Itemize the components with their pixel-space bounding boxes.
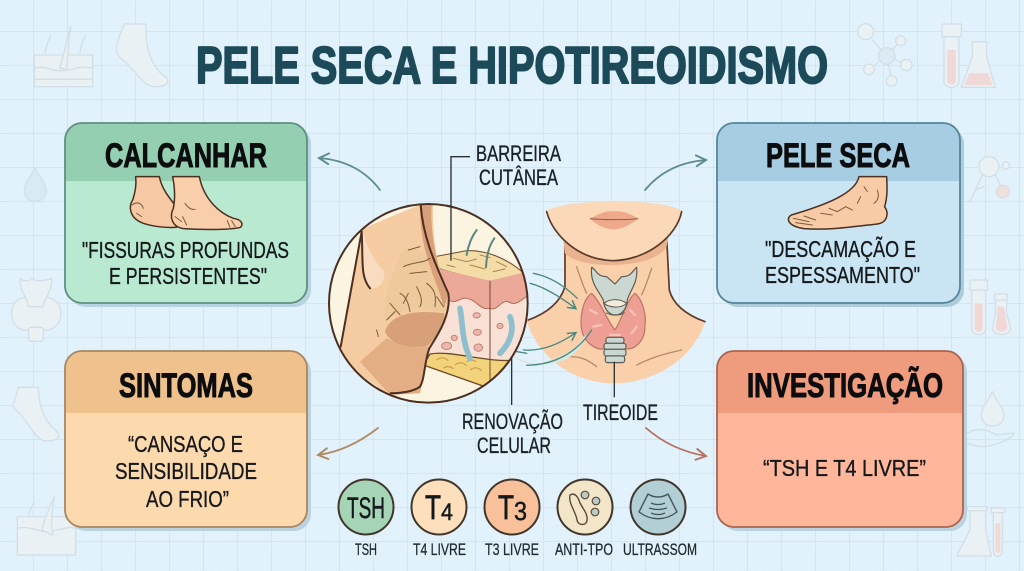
- icon: thyroid cartilage: [591, 267, 637, 315]
- arrows: skin to thyroid: [498, 273, 592, 365]
- label: tireoide: TIREOIDE: [583, 400, 658, 425]
- exam icon: T4 livre: [412, 480, 466, 559]
- icon: faded molecule top right: [858, 24, 912, 86]
- text: cansaco: SENSIBILIDADE: [115, 458, 257, 484]
- icon: dry foot: [788, 177, 887, 229]
- icon: faded test tube and flask top right: [942, 24, 995, 87]
- icon: thyroid gland: [581, 293, 645, 349]
- exam icon: ultrassom: ULTRASSOM: [623, 540, 697, 559]
- central illustration: [327, 157, 705, 407]
- icon: faded skin section bottom left: [17, 497, 76, 555]
- icon: faded thyroid left: [12, 278, 61, 341]
- label: barreira cutanea: [476, 141, 561, 190]
- exam icon: TSH: TSH: [355, 540, 377, 559]
- exam icon: anti-TPO: [555, 480, 613, 559]
- panel: pele seca: [717, 123, 964, 307]
- text: descamacao: "DESCAMAÇÃO E: [765, 236, 916, 262]
- label: renovacao celular: RENOVAÇÃO: [462, 409, 563, 434]
- icon: two feet with cracked heels: [130, 177, 242, 230]
- exam icon: T3 livre: [484, 480, 540, 559]
- label: renovacao celular: CELULAR: [477, 433, 551, 458]
- icon: faded magnifier molecule right: [970, 157, 1010, 202]
- exam icon: T3 livre: T: [498, 489, 514, 527]
- arrow: to pele seca: [645, 160, 706, 190]
- exam icon: T3 livre: 3: [514, 496, 527, 526]
- neck and thyroid illustration: [527, 201, 705, 383]
- skin layers: [423, 230, 527, 387]
- text: descamacao: ESPESSAMENTO": [765, 262, 920, 288]
- icon: trachea rings: [604, 337, 626, 363]
- panel: investigacao: [717, 351, 967, 531]
- text: fissuras: E PERSISTENTES": [109, 263, 267, 289]
- exam icon: T4 livre: T: [425, 489, 441, 527]
- icon: faded drop and hand right: [967, 392, 1015, 447]
- heading: sintomas: SINTOMAS: [119, 367, 253, 405]
- magnified heel and skin section: [327, 198, 533, 407]
- text: cansaco: [115, 431, 257, 512]
- text: tsh e t4 livre: “TSH E T4 LIVRE”: [763, 455, 926, 481]
- icon: faded foot left: [14, 387, 59, 441]
- text: fissuras: [82, 237, 289, 289]
- icon: faded skin section top left: [34, 26, 93, 87]
- heading: pele seca: PELE SECA: [766, 137, 910, 175]
- exam icon: ultrassom: [623, 480, 697, 559]
- heel: [340, 198, 449, 397]
- label: renovacao celular: [462, 409, 563, 458]
- text: fissuras: "FISSURAS PROFUNDAS: [82, 237, 289, 263]
- arrow: to calcanhar: [319, 158, 380, 190]
- exam icon: T4 livre: T4 LIVRE: [413, 540, 466, 559]
- label: barreira cutanea: BARREIRA: [476, 141, 561, 166]
- heading: calcanhar: CALCANHAR: [105, 137, 267, 175]
- panel: calcanhar: [65, 123, 311, 307]
- text: cansaco: AO FRIO”: [146, 486, 229, 512]
- heading: investigacao: INVESTIGAÇÃO: [747, 367, 943, 405]
- arrow: to sintomas: [318, 428, 378, 455]
- icon: faded flask and tube bottom right: [957, 507, 1005, 556]
- leader lines: [451, 157, 614, 405]
- exam icon: anti-TPO: ANTI-TPO: [555, 540, 613, 559]
- text: descamacao: [765, 236, 920, 288]
- exam icon: TSH: TSH: [347, 492, 385, 525]
- label: barreira cutanea: CUTÂNEA: [479, 165, 558, 190]
- icon: faded foot top left: [117, 24, 168, 87]
- arrow: to investigacao: [646, 428, 706, 456]
- exam icon: T4 livre: 4: [441, 499, 453, 526]
- title: PELE SECA E HIPOTIREOIDISMO: [196, 37, 828, 95]
- panel: sintomas: [65, 351, 311, 531]
- exam icon: T3 livre: T3 LIVRE: [485, 540, 539, 559]
- text: cansaco: “CANSAÇO E: [128, 431, 243, 457]
- exam icon: TSH: [338, 480, 394, 559]
- icon: faded tubes right: [970, 280, 1011, 335]
- icon: faded drop left: [24, 168, 46, 201]
